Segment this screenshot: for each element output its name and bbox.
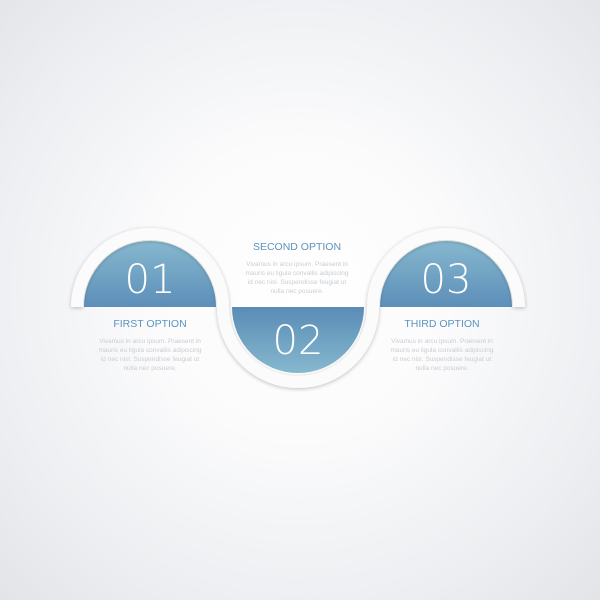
text block: first option: Vivamus in arcu ipsum. Praesent in: [99, 338, 201, 345]
blue semicircle 1: [84, 241, 216, 307]
text block: third option: nulla nec posuere.: [415, 365, 469, 372]
number 02: 02: [273, 318, 323, 364]
text block: third option: Vivamus in arcu ipsum. Praesent in: [391, 338, 493, 345]
text block: second option: mauris eu ligula convallis adipiscing: [246, 270, 349, 277]
text block: first option: FIRST OPTION: [113, 318, 187, 330]
blue semicircle 3: [380, 241, 512, 307]
text block: second option: SECOND OPTION: [253, 241, 341, 253]
text block: third option: THIRD OPTION: [404, 318, 480, 330]
text block: first option: mauris eu ligula convallis adipiscing: [99, 347, 202, 354]
text block: third option: id nec nisl. Suspendisse feugiat ut: [393, 356, 491, 363]
text block: second option: Vivamus in arcu ipsum. Praesent in: [246, 261, 348, 268]
text block: second option: id nec nisl. Suspendisse feugiat ut: [248, 279, 346, 286]
blue semicircle 2: [232, 307, 364, 373]
text block: second option: nulla nec posuere.: [270, 288, 324, 295]
text block: first option: [99, 318, 202, 372]
number 01: 01: [125, 257, 175, 303]
white S ring: [77, 234, 519, 382]
text block: first option: id nec nisl. Suspendisse feugiat ut: [101, 356, 199, 363]
text block: third option: [391, 318, 494, 372]
text block: first option: nulla nec posuere.: [123, 365, 177, 372]
number 03: 03: [421, 257, 471, 303]
text block: third option: mauris eu ligula convallis adipiscing: [391, 347, 494, 354]
text block: second option: [246, 241, 349, 295]
